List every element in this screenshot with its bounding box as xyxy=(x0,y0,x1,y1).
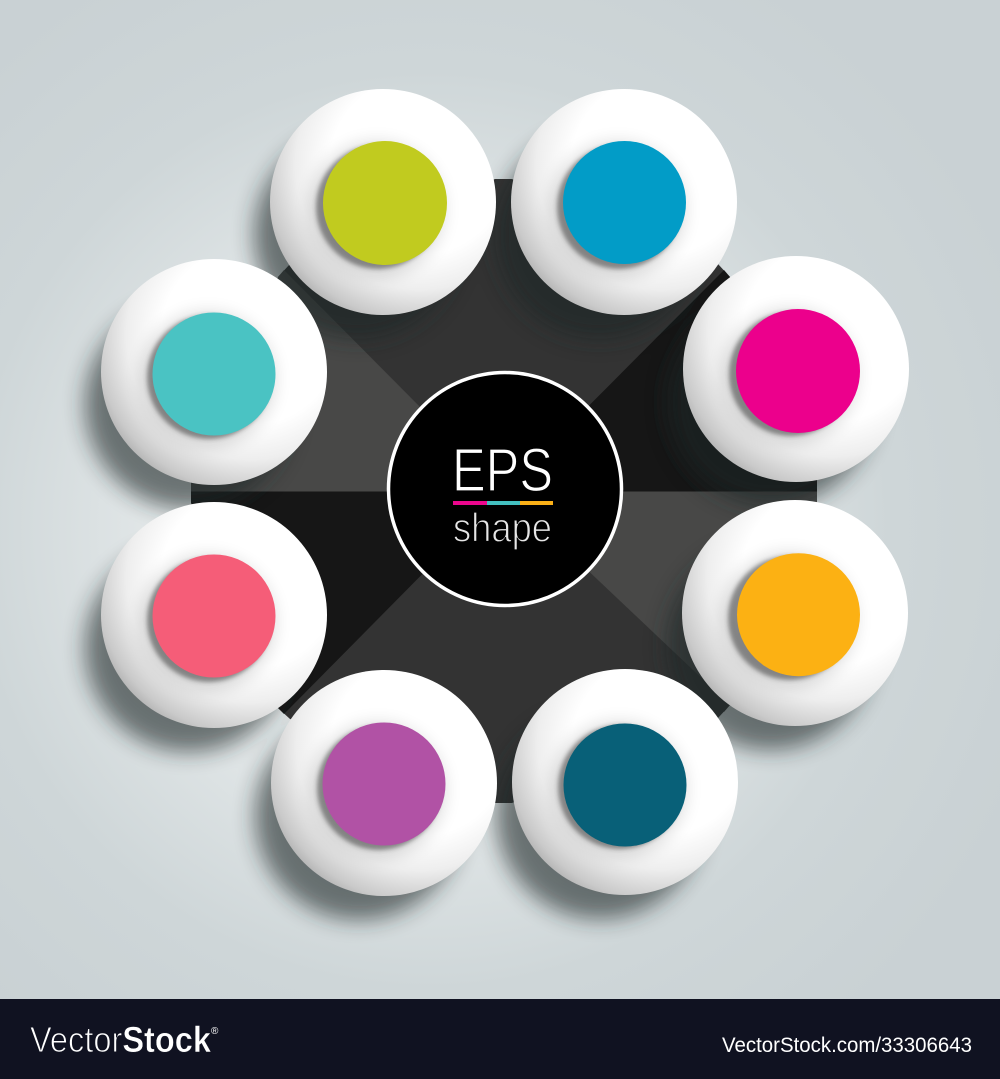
ball: magenta xyxy=(683,256,909,482)
ball: blue xyxy=(511,89,737,315)
title: EPS: EPS xyxy=(452,436,553,504)
footer logo: VectorStock xyxy=(30,1019,212,1060)
ball: turquoise xyxy=(101,259,327,485)
sector: top xyxy=(278,179,730,491)
sector: upper left xyxy=(191,270,504,492)
footer id: VectorStock.com/33306643 xyxy=(722,1034,972,1057)
octagon base xyxy=(191,179,817,803)
sector: bottom xyxy=(278,491,730,803)
ball: amber xyxy=(682,500,908,726)
ball: purple xyxy=(271,670,497,896)
ball shadows xyxy=(85,131,875,920)
ball: lime xyxy=(270,89,496,315)
footer bar xyxy=(0,999,1000,1079)
center badge xyxy=(388,372,622,606)
ball: coral xyxy=(101,502,327,728)
colour bar xyxy=(453,501,553,505)
sector: lower left xyxy=(191,492,504,714)
sector: upper right xyxy=(504,270,817,492)
sector: lower right xyxy=(504,492,817,712)
footer registered mark: ® xyxy=(211,1026,219,1037)
ball: teal xyxy=(512,669,738,895)
subtitle: shape: shape xyxy=(453,504,552,550)
